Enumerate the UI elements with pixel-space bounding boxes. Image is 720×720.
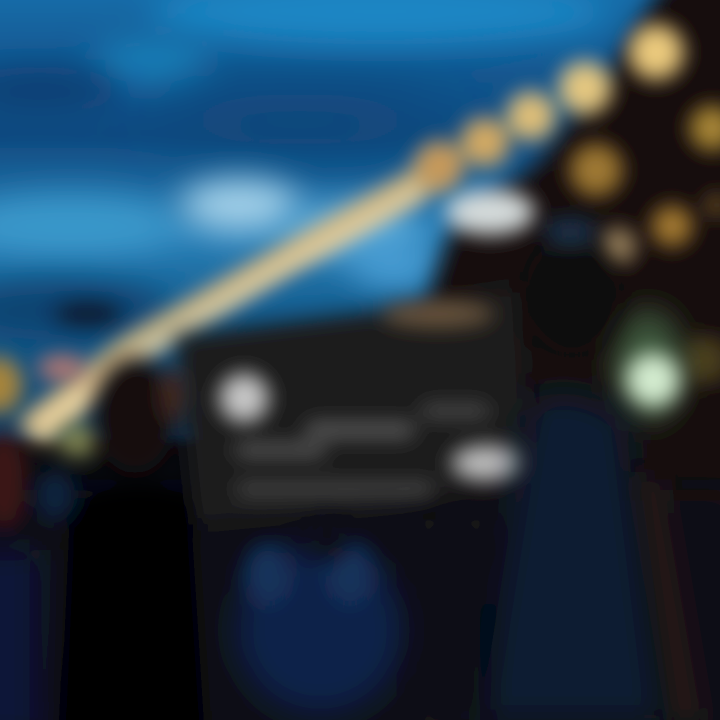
bright highlight at centre bbox=[446, 190, 534, 234]
silhouette: person left bbox=[54, 301, 205, 720]
sky background bbox=[0, 0, 720, 440]
dark building on the right bbox=[400, 0, 720, 720]
sign text lines blur bbox=[235, 404, 490, 496]
silhouette: person right bbox=[480, 218, 705, 720]
sign logo blur bbox=[220, 374, 268, 422]
blue figures in centre bottom bbox=[235, 518, 480, 720]
sign button blur bbox=[452, 446, 524, 480]
dark lower crowd area bbox=[0, 490, 720, 720]
string of light glow bbox=[0, 160, 450, 458]
green-white lamp bbox=[614, 309, 682, 421]
sign heading blur bbox=[382, 301, 494, 327]
dark sign panel bbox=[175, 285, 530, 525]
bulb lights bbox=[416, 25, 720, 384]
figures far left bbox=[0, 430, 75, 720]
